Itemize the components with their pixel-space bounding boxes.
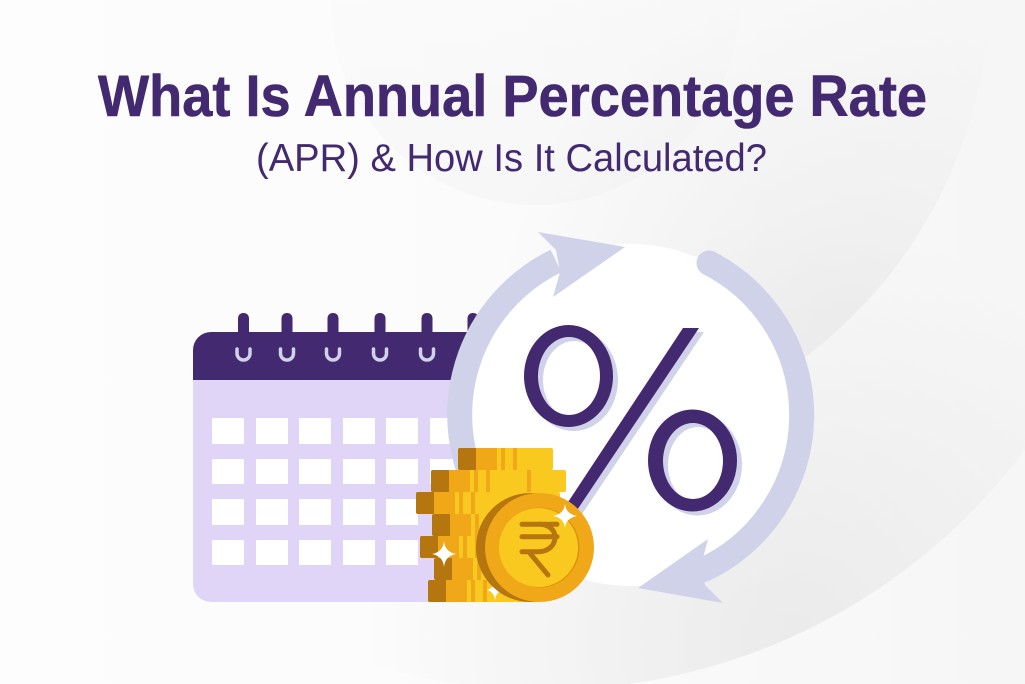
icon: coin stack bbox=[416, 448, 566, 602]
icon: calendar bbox=[193, 313, 500, 602]
arrow: lower circular arrow bbox=[638, 263, 802, 603]
rupee symbol bbox=[522, 524, 557, 575]
coin row 5 bbox=[420, 536, 530, 558]
sparkle: coin stack left bbox=[432, 541, 456, 567]
percent glyph shape bbox=[524, 325, 737, 540]
coin row 1 bbox=[458, 448, 553, 470]
sparkle: lower stack bbox=[487, 580, 503, 600]
icon: white percent disc bbox=[460, 244, 802, 586]
calendar body bbox=[193, 370, 500, 602]
coin row 3 bbox=[416, 492, 560, 514]
coin row 2 bbox=[431, 470, 566, 492]
arrow: upper circular arrow bbox=[460, 232, 625, 500]
icon: rupee coin bbox=[476, 493, 594, 602]
coin row 4 bbox=[432, 514, 542, 536]
percent shadow bbox=[529, 329, 742, 544]
sparkle: coin rim bbox=[553, 504, 577, 528]
title: What Is Annual Percentage Rate bbox=[98, 64, 927, 129]
calendar header bbox=[193, 332, 500, 380]
icon: percent sign bbox=[524, 325, 742, 544]
coin row 7 bbox=[428, 580, 538, 602]
calendar binder posts bbox=[238, 313, 478, 337]
calendar binder holes bbox=[237, 349, 434, 360]
coin row 6 bbox=[434, 558, 534, 580]
subtitle: (APR) & How Is It Calculated? bbox=[256, 137, 767, 180]
calendar date cells bbox=[212, 418, 462, 565]
